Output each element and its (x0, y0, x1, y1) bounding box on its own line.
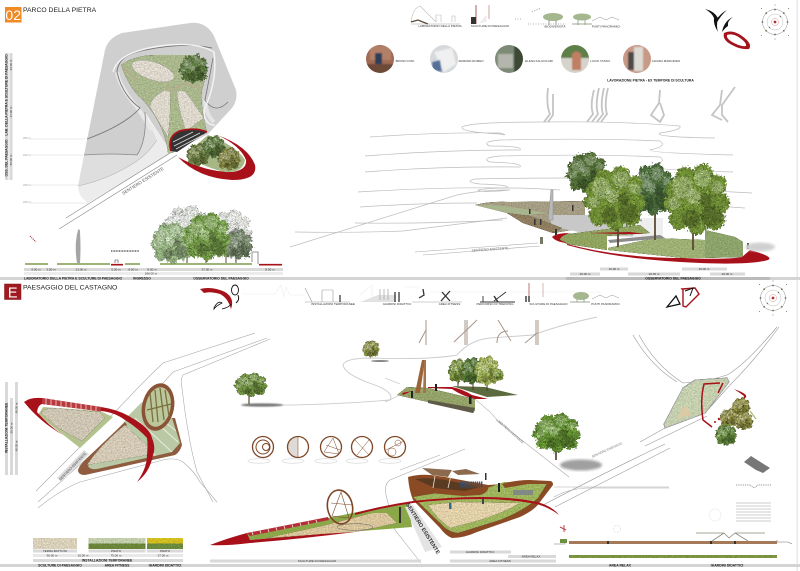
dimensions: perspective: 10.00 m (699, 267, 710, 271)
logo: castagno (200, 285, 239, 309)
icon row: top (411, 5, 620, 28)
logo: right (667, 288, 699, 307)
level lines: 230 m (23, 183, 31, 187)
legend bars: 10.00 m (78, 553, 89, 557)
ground (25, 263, 282, 266)
icon: panoramici (570, 292, 620, 306)
middle lawn (608, 238, 705, 258)
icon: fitness (412, 289, 462, 306)
lower plan lines: SENTIERO ESISTENTE (591, 441, 623, 459)
stone sculpture (76, 229, 80, 263)
circle 4 (346, 436, 372, 463)
island garden (187, 135, 245, 172)
band: bottom section labels: AREA FITNESS (105, 563, 130, 567)
caption: LAVORAZIONE PIETRA - EX TEMPORE DI SCULTURA (607, 78, 694, 82)
heading: parco della pietra (5, 7, 97, 23)
pergola (422, 468, 480, 488)
vertical legend: mid plan: 50.00 m (9, 422, 13, 433)
band: top section labels: OSSERVATORIO DEL PAESAGGIO (645, 276, 701, 280)
lower perspective: castagno (210, 468, 559, 556)
plan: parco della pietra (59, 23, 255, 229)
red mark (560, 525, 566, 532)
green clump (560, 539, 567, 543)
tree: large centre (533, 413, 602, 470)
circle 1 (248, 436, 274, 463)
dashed canopy (111, 250, 139, 252)
bands around garden (117, 72, 152, 130)
mid plan: castagno (24, 380, 182, 482)
stone sculptures row (544, 87, 735, 122)
earth bank (507, 213, 562, 233)
legend bars: 90.00 m (47, 553, 58, 557)
material legend (33, 538, 183, 562)
vertical legend: top plan: OSS. DEL PAESAGGIO (5, 139, 9, 176)
figures (449, 473, 533, 509)
contour lines (87, 45, 212, 139)
platform (397, 387, 475, 413)
dimensions: perspective: 20.00 m (580, 272, 591, 276)
dimension bars: 21.00 m (76, 267, 87, 271)
right mini plan (543, 327, 779, 507)
dimension bars bottom: GIARDINI DIDATTICI (466, 550, 494, 554)
lawn and paving strip (475, 201, 585, 233)
vegetation band (569, 555, 777, 558)
dimension bars: 8.00 m (265, 267, 275, 271)
heading: paesaggio del castagno (4, 284, 117, 302)
legend bars: PRATO (111, 549, 122, 553)
figures (607, 541, 736, 544)
rust outline (78, 418, 182, 475)
vertical legend: top plan: 26.00 m (9, 59, 13, 70)
road lines (385, 378, 502, 425)
portrait 4 (561, 45, 610, 73)
legend bars: PRATO (160, 549, 171, 553)
terrain medium (78, 112, 157, 186)
sketch tree (614, 526, 620, 532)
sand (677, 405, 692, 418)
trees (715, 398, 753, 446)
dimension bars: 8.00 m (147, 267, 157, 271)
tree: small top (362, 340, 389, 362)
band: bottom section labels (0, 563, 800, 567)
garden tree (180, 54, 208, 83)
dimension bars (24, 267, 283, 276)
trees (566, 152, 729, 235)
trunks (458, 380, 487, 391)
dimensions: perspective (570, 267, 745, 276)
sculpture circles (248, 436, 406, 463)
visitors (460, 482, 483, 488)
garden perspective (475, 152, 775, 264)
sculptor portraits (366, 45, 694, 82)
vertical legend: mid plan: 40.00 m (14, 402, 18, 413)
ground shadow (452, 386, 518, 397)
icon: biodiversita (515, 8, 566, 28)
swatch prato (88, 538, 146, 549)
earth strip (569, 541, 777, 544)
icon: biodiversita: BIODIVERSITÀ (544, 24, 566, 28)
dimension bars bottom (210, 550, 556, 563)
swatch terra battuta (33, 538, 77, 549)
sand field (428, 502, 520, 528)
sand left (41, 408, 105, 441)
vertical legend: top plan (5, 53, 13, 180)
portrait 4: LUCIO TASSO (590, 59, 611, 63)
crossing text: SENTIERO ESISTENTE (58, 451, 88, 481)
wall right (502, 480, 552, 488)
canopy (696, 533, 765, 541)
red arc (24, 398, 154, 482)
wedge stripes (247, 517, 329, 536)
dimension bars: 186.00 m (145, 272, 158, 276)
section trees (151, 206, 253, 263)
dimension bars: 8.00 m (128, 267, 138, 271)
roads (543, 327, 779, 507)
icon: giardini: GIARDINI DIDATTICI (383, 302, 411, 306)
red crescent island (178, 135, 255, 180)
hatching (736, 503, 771, 521)
figures (529, 205, 749, 249)
ring sculpture (325, 488, 355, 526)
wedge sand (267, 513, 397, 538)
vertical legend: top plan: 37.00 m (9, 106, 13, 117)
dimensions: perspective: 20.00 m (649, 272, 660, 276)
level lines: 240 m (23, 153, 31, 157)
mid plan: roads (36, 333, 270, 508)
red loop (428, 387, 488, 399)
icon: book (744, 456, 770, 473)
grey plaza (548, 215, 663, 237)
plant sticks (718, 411, 756, 429)
lower plan lines (386, 420, 669, 563)
red hook (734, 389, 746, 402)
right detail sketches (709, 456, 771, 521)
figures (411, 384, 472, 404)
band: top section labels: LABORATORIO DELLA PIETRA E SCULTURE DI PAESAGGIO (24, 276, 122, 280)
portrait 3 (495, 45, 553, 73)
stone sculpture (548, 190, 553, 220)
light lawn strip (475, 205, 548, 216)
icon: trekking (476, 292, 515, 306)
dimension bars: 9.00 m (31, 267, 41, 271)
sketch plant (709, 509, 721, 521)
portrait 2 (430, 45, 484, 73)
garden (121, 55, 207, 153)
faint skyline (242, 285, 600, 297)
compass: top (761, 4, 789, 40)
vertical legend: mid plan: INSTALLAZIONI TEMPORANEE (4, 402, 8, 453)
portrait 2: ARMAND ROMEO (458, 59, 484, 63)
dimensions: perspective: 10.00 m (609, 267, 620, 271)
oval garden (137, 380, 179, 434)
small structure (252, 252, 258, 264)
legend bars (33, 549, 183, 562)
right triangle lawn (84, 402, 182, 473)
triangle rust base (408, 477, 553, 538)
circle 3 (315, 436, 342, 463)
compass: bottom (759, 280, 787, 316)
icon: fitness: AREA FITNESS (439, 302, 460, 306)
portrait 3: ELENA FALOOCARI (525, 59, 553, 63)
terrain lightest (78, 102, 172, 203)
tree: small left (234, 373, 283, 407)
icon: panoramici: PUNTI PANORAMICI (591, 302, 620, 306)
wedge red tip (210, 532, 355, 545)
mid perspective garden (385, 356, 518, 425)
triangle lawn (413, 482, 548, 533)
vertical legend: top plan: 56.00 m (9, 154, 13, 165)
icon: sculture: SCULTURE DI PAESAGGIO (529, 302, 568, 306)
swatch prato giallo (147, 538, 183, 549)
stripes (128, 410, 180, 460)
band: bottom section labels: GIARDINI DIDATTICI (711, 563, 743, 567)
band: bottom section labels: AREA RELAX (609, 563, 632, 567)
legend bars: INSTALLAZIONI TEMPORANEE (82, 558, 133, 562)
legend bars: TERRA BATTUTA (43, 549, 67, 553)
lawn (553, 225, 650, 250)
grey path (608, 235, 665, 243)
portrait 5 (623, 45, 680, 73)
right edge rule (796, 0, 798, 571)
dimension bars bottom: SCULTURE DI PAESAGGIO (298, 559, 337, 563)
red arc (355, 497, 559, 515)
stone paving (129, 56, 204, 137)
wall back (408, 475, 488, 496)
title: PARCO DELLA PIETRA (23, 7, 97, 14)
icon: sculture: SCULTURE DI PAESAGGIO (471, 24, 510, 28)
striped crossing (170, 129, 207, 152)
vertical legend: top plan: LAB. DELLA PIETRA E SCULTURE DI PAESAGGIO (5, 54, 9, 136)
path sentiero esistente (59, 153, 177, 229)
dimensions: perspective: 20.00 m (722, 272, 733, 276)
icon: trekking: PERCORSO DI TREKKING (476, 302, 514, 306)
lower plan lines: SENTIERO ESISTENTE (497, 420, 525, 444)
terrain dark (84, 23, 236, 155)
shadow (745, 242, 775, 252)
dimension bars bottom: AREA RELAX (522, 554, 540, 558)
figure (115, 260, 118, 263)
island trees (186, 135, 240, 170)
icon: punti panoramici (572, 14, 620, 28)
section: castagno (554, 525, 792, 558)
icon: laboratorio: LABORATORIO DELLA PIETRA (418, 24, 462, 28)
portrait 1: BRUNO FOIK (396, 59, 414, 63)
vertical legend: mid plan (4, 382, 18, 475)
dimension bars: 6.00 m (111, 267, 121, 271)
band: bottom section labels: GIARDINI DIDATTICI (149, 563, 181, 567)
icon row: bottom (242, 283, 620, 306)
level lines: 250 m (23, 136, 31, 140)
red bracket (702, 383, 723, 427)
title: PAESAGGIO DEL CASTAGNO (23, 284, 117, 292)
tall sculpture (415, 360, 426, 393)
icon: punti panoramici: PUNTI PANORAMICI (592, 24, 620, 28)
band: top section labels: INGRESSO (133, 276, 151, 280)
dimension bars: 3.00 m (46, 267, 56, 271)
level lines (23, 136, 88, 204)
icon: sculture (471, 5, 510, 28)
circle 2 (282, 436, 308, 463)
striped arc segment (42, 398, 101, 412)
hedge wall (705, 230, 743, 258)
path sentiero esistente: SENTIERO ESISTENTE (121, 166, 165, 196)
trunks (588, 190, 693, 250)
badge 02: 02 (5, 7, 21, 23)
icon: giardini (360, 289, 411, 306)
icon: sculture (526, 283, 568, 306)
path sentiero: perspective: SENTIERO ESISTENTE (471, 246, 509, 253)
legend bars: 37.00 m (158, 553, 169, 557)
dimension bars: 37.00 m (202, 267, 213, 271)
crossing: SENTIERO ESISTENTE (404, 502, 441, 556)
dotted section (736, 485, 771, 488)
portrait 1 (366, 45, 414, 73)
white plaza (633, 218, 663, 237)
platform dark base (428, 400, 475, 413)
left wing (38, 407, 113, 448)
garden (664, 378, 729, 428)
ground line (554, 540, 792, 544)
portrait 5: CHIARA MARGRIDO (652, 59, 681, 63)
wedge lawn (247, 503, 412, 540)
person (399, 507, 401, 523)
red dots (714, 408, 734, 423)
level lines: 220 m (23, 200, 31, 204)
icon: laboratorio (411, 6, 462, 28)
trees (448, 356, 504, 386)
dimension bars bottom: AREA FITNESS (489, 559, 511, 563)
band: bottom section labels: SCULTURE DI PAESAGGIO (38, 563, 82, 567)
path sentiero: perspective (415, 243, 540, 255)
logo: top (705, 9, 750, 49)
ring shadow (337, 524, 373, 530)
circle 5 (379, 436, 406, 463)
red path (552, 232, 770, 264)
vertical legend: mid plan: 40.00 m (14, 440, 18, 451)
band: top section labels (0, 276, 800, 280)
icon: installazioni: INSTALLAZIONI TEMPORANEE (311, 302, 355, 306)
sculptures row bottom (419, 320, 538, 345)
small red figure (30, 236, 36, 242)
section: parco della pietra (24, 206, 283, 276)
sand right (87, 425, 152, 465)
contour lines: perspective (290, 122, 752, 247)
icon: installazioni (305, 288, 355, 306)
legend bars: 75.00 m (111, 553, 122, 557)
band: top section labels: OSSERVATORIO DEL PAESAGGIO (193, 276, 249, 280)
trekking line (245, 317, 597, 405)
badge E: E (8, 286, 18, 302)
